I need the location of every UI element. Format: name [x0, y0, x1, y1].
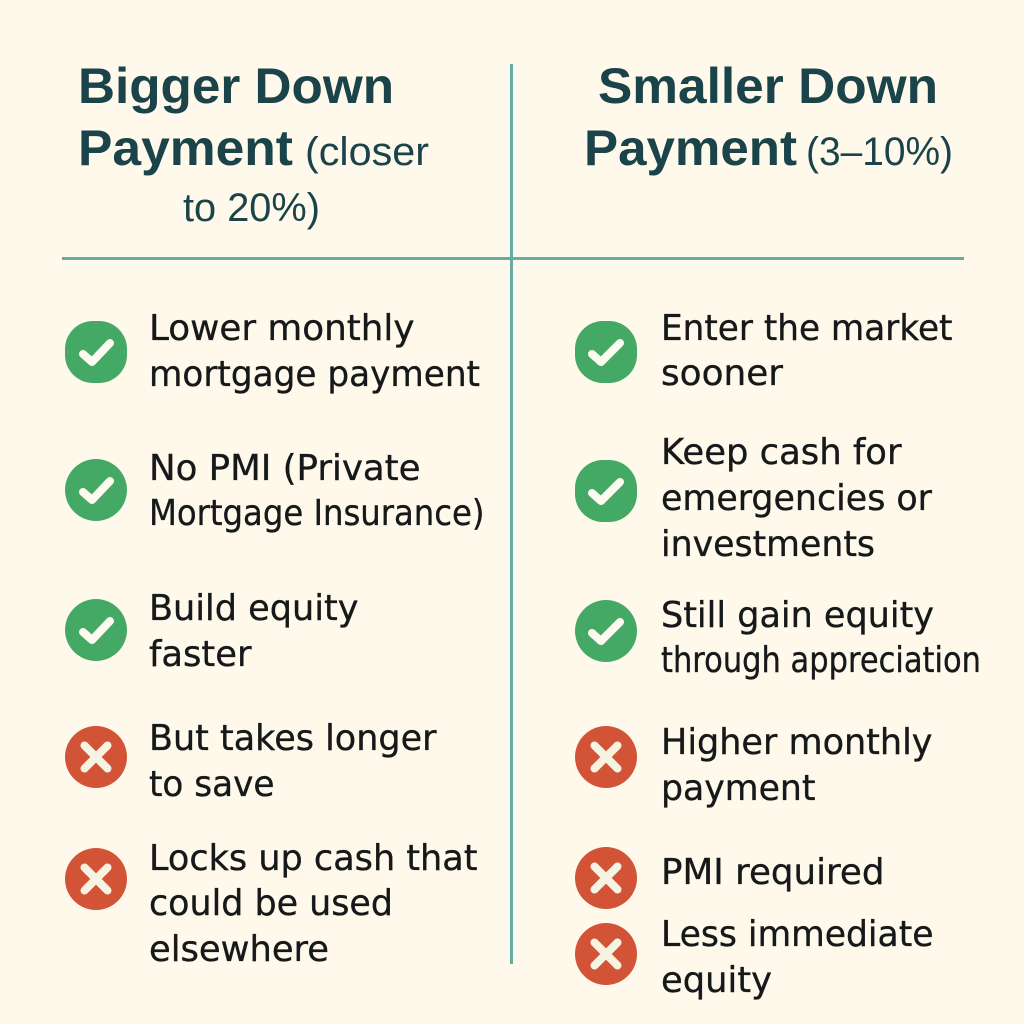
text: locks up cash: Locks up cash that [149, 838, 478, 879]
icon: cross [65, 726, 127, 788]
text: lower monthly mortgage payment [149, 308, 480, 395]
heading: smaller down payment: Payment [584, 120, 797, 176]
icon: cross [575, 847, 637, 909]
heading: smaller down payment: (3–10%) [806, 130, 953, 174]
text: less immediate equity [661, 914, 934, 1001]
heading: bigger down payment: Bigger Down [78, 58, 394, 114]
text: no PMI: Mortgage Insurance) [149, 493, 484, 534]
text: enter the market sooner: Enter the market [661, 308, 952, 349]
text: build equity faster: Build equity [149, 588, 358, 629]
text: but takes longer to save: But takes longer [149, 718, 437, 759]
text: less immediate equity: equity [661, 960, 772, 1001]
heading: smaller down payment: Smaller Down [598, 58, 938, 114]
text: keep cash: Keep cash for [661, 432, 902, 473]
text: but takes longer to save: to save [149, 764, 274, 805]
text: higher monthly payment: Higher monthly [661, 722, 932, 763]
text: but takes longer to save [149, 718, 437, 805]
text: keep cash: emergencies or [661, 478, 932, 519]
icon: check [575, 321, 637, 383]
text: lower monthly mortgage payment: mortgage payment [149, 354, 480, 395]
text: higher monthly payment [661, 722, 932, 809]
icon: check [65, 459, 127, 521]
text: PMI required: PMI required [661, 852, 884, 893]
heading: bigger down payment: Payment [78, 120, 293, 176]
icon: check [575, 460, 637, 522]
text: build equity faster: faster [149, 634, 252, 675]
heading: bigger down payment: to 20%) [183, 186, 320, 230]
text: enter the market sooner: sooner [661, 353, 783, 394]
text: lower monthly mortgage payment: Lower monthly [149, 308, 414, 349]
text: locks up cash [149, 838, 478, 970]
text: still gain equity [661, 595, 981, 681]
icon: check [575, 600, 637, 662]
heading: smaller down payment [584, 58, 953, 176]
text: keep cash: investments [661, 524, 875, 565]
text: locks up cash: could be used [149, 883, 393, 924]
icon: cross [575, 726, 637, 788]
icon: check [65, 599, 127, 661]
text: build equity faster [149, 588, 358, 675]
heading: bigger down payment: (closer [305, 130, 429, 174]
text: no PMI: No PMI (Private [149, 448, 420, 489]
text: less immediate equity: Less immediate [661, 914, 934, 955]
text: higher monthly payment: payment [661, 768, 816, 809]
icon: check [65, 321, 127, 383]
text: locks up cash: elsewhere [149, 929, 329, 970]
icon: cross [575, 923, 637, 985]
heading: bigger down payment [78, 58, 429, 230]
text: enter the market sooner [661, 308, 952, 394]
text: still gain equity: Still gain equity [661, 595, 934, 636]
icon: cross [65, 848, 127, 910]
text: keep cash [661, 432, 932, 565]
text: no PMI [149, 448, 484, 534]
